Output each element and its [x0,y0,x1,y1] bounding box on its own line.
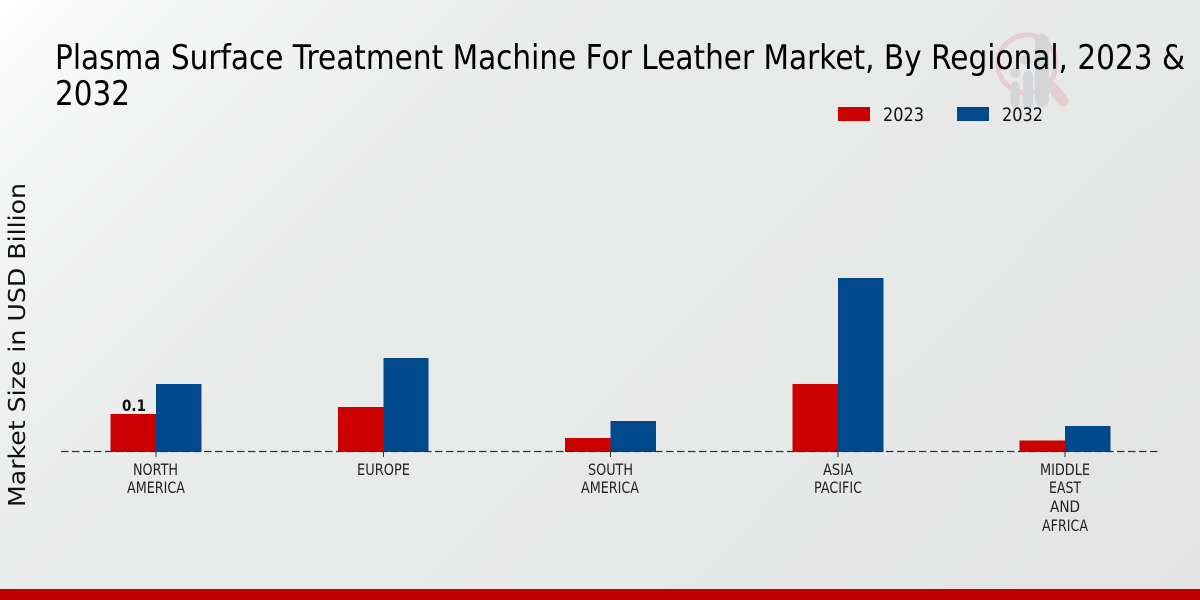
footer bar [0,589,1200,600]
legend: 2023 [883,104,924,126]
label: North America: AMERICA [127,478,185,497]
label: Asia Pacific: ASIA [823,460,853,479]
label: South America: SOUTH [588,460,633,479]
bars: Middle East and Africa [1020,426,1110,452]
label: Middle East and Africa: AND [1050,497,1080,516]
icon: watermark logo [998,35,1063,103]
bars: South America [565,421,656,452]
label: Middle East and Africa: AFRICA [1042,516,1088,535]
category labels [127,460,1090,535]
label: Middle East and Africa: MIDDLE [1040,460,1090,479]
bars: Europe [338,358,428,452]
label: South America: AMERICA [581,478,639,497]
title: 2032 [55,74,130,114]
data label: 0.1: 0.1 [122,396,146,415]
legend [838,104,1043,126]
label: North America: NORTH [133,460,178,479]
bar chart [61,278,1160,457]
label: Europe: EUROPE [357,460,410,479]
y axis title: Market Size in USD Billion [5,183,31,507]
label: Asia Pacific [814,460,862,497]
label: North America [127,460,185,497]
legend: 2032 [1002,104,1043,126]
label: Middle East and Africa [1040,460,1090,535]
bars: North America [110,384,202,452]
label: Middle East and Africa: EAST [1049,478,1081,497]
label: Asia Pacific: PACIFIC [814,478,862,497]
label: South America [581,460,639,497]
title [55,38,1185,114]
bars: Asia Pacific [792,278,884,452]
